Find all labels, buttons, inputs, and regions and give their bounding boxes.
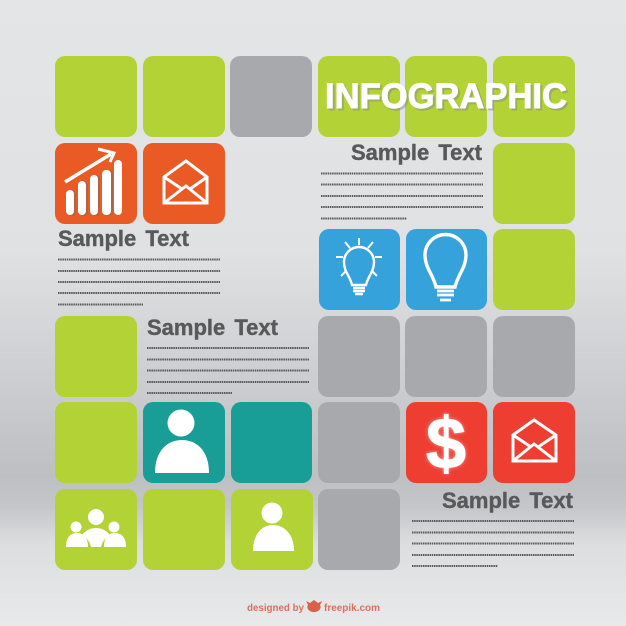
icon: open envelope orange [164,161,207,203]
footer credit: freepik.com [324,603,380,614]
heading: bottom right sample text: Sample Text [442,488,574,513]
icon: person green [253,502,294,551]
text block: left dotted lines [58,260,220,304]
text block: middle dotted lines [147,348,309,393]
icon: open envelope red [513,420,556,461]
tile grid [55,56,575,570]
heading: left sample text: Sample Text [58,226,190,251]
icon: dollar sign: $ [426,404,466,484]
icon: group of people [66,509,126,547]
text block: bottom right dotted lines [412,521,574,566]
title: INFOGRAPHIC [327,79,569,118]
footer credit [247,600,380,614]
heading: middle sample text: Sample Text [147,315,279,340]
icon: dollar sign: $ [426,404,466,484]
icon: light bulb with rays [336,238,382,294]
icon: person teal [155,410,209,473]
icon: bar chart with arrow [65,149,122,216]
title: INFOGRAPHIC [325,77,567,116]
text block: top right dotted lines [321,174,483,218]
heading: top right sample text: Sample Text [351,140,483,165]
icon: large light bulb [425,234,466,300]
footer credit: designed by [247,603,304,614]
